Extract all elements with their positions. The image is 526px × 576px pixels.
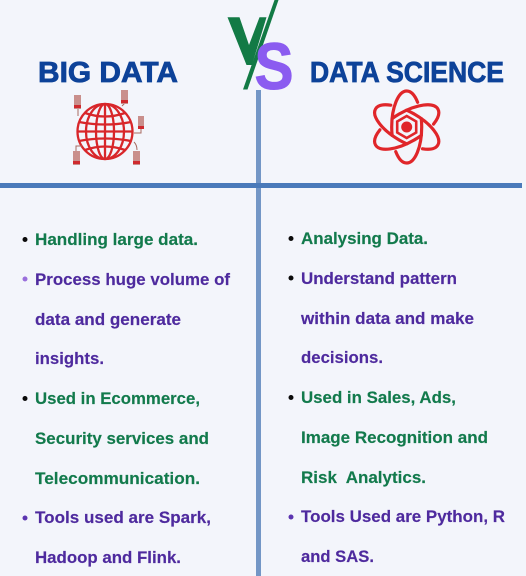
bullets: big data: Security services and <box>35 429 209 448</box>
heading: data science: DATA SCIENCE <box>310 57 504 89</box>
bullets: big data: Used in Ecommerce, <box>35 389 200 408</box>
VS emblem <box>228 0 294 103</box>
icon: globe network <box>73 90 144 165</box>
vertical divider <box>256 90 261 576</box>
bullets: big data: insights. <box>35 349 104 368</box>
bullets: data science: Tools Used are Python, R <box>301 507 505 526</box>
bullets: data science: Image Recognition and <box>301 428 488 447</box>
bullets: big data: Tools used are Spark, <box>35 508 211 527</box>
bullets: data science: decisions. <box>301 348 383 367</box>
bullets: big data: Telecommunication. <box>35 469 200 488</box>
heading: big data: BIG DATA <box>38 57 178 89</box>
bullets: data science: within data and make <box>300 309 474 328</box>
bullets: data science: Understand pattern <box>301 269 457 288</box>
bullets: big data: data and generate <box>35 310 181 329</box>
bullets: big data: Hadoop and Flink. <box>35 548 181 567</box>
bullets: data science: Risk Analytics. <box>301 468 426 487</box>
bullets: data science <box>288 229 505 566</box>
VS emblem: S <box>254 29 294 103</box>
bullets: big data <box>22 230 230 567</box>
bullets: big data: Process huge volume of <box>35 270 230 289</box>
bullets: data science: Analysing Data. <box>301 229 428 248</box>
icon: atom <box>368 91 445 163</box>
bullets: big data: Handling large data. <box>35 230 198 249</box>
bullets: data science: Used in Sales, Ads, <box>301 388 456 407</box>
bullets: data science: and SAS. <box>301 547 374 566</box>
horizontal divider <box>0 183 522 188</box>
